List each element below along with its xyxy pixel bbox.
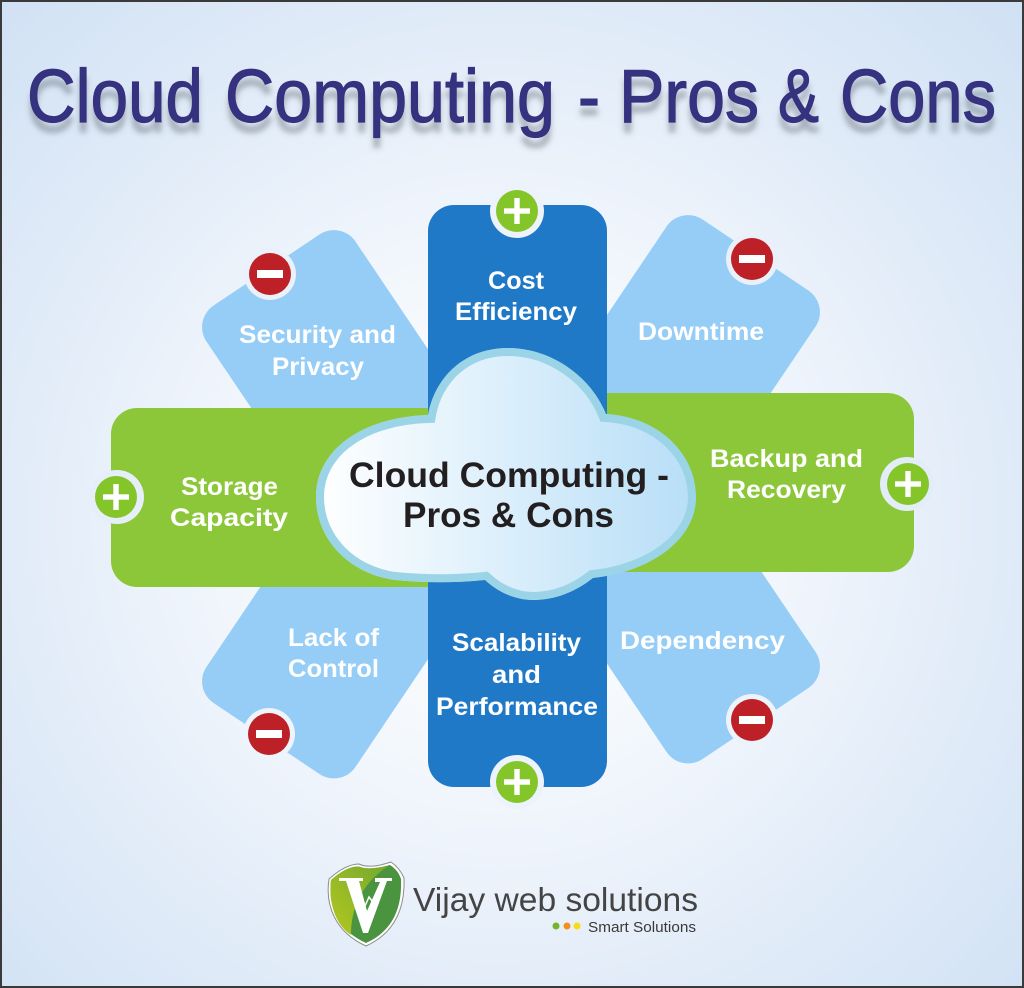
panel: storage capacity (pro) [111, 408, 511, 587]
title: & [778, 54, 819, 138]
cloud heading [349, 456, 669, 535]
panel: lack of control (con) [202, 580, 442, 778]
label: scalability and performance: and [492, 661, 541, 689]
label: cost efficiency: Efficiency [455, 298, 577, 326]
label: cost efficiency: Cost [488, 267, 545, 295]
label: storage capacity [170, 473, 288, 532]
title: - [578, 54, 600, 138]
logo [328, 862, 698, 946]
label: downtime: Downtime [638, 318, 764, 346]
label: lack of control: Lack of [288, 624, 380, 652]
title: Cons [840, 54, 996, 138]
title [27, 54, 996, 138]
label: backup and recovery: Recovery [727, 476, 846, 504]
icon: plus left [90, 470, 144, 524]
icon: plus right [880, 457, 934, 511]
icon: minus lack of control [243, 708, 295, 760]
label: scalability and performance: Scalability [452, 629, 581, 657]
cloud heading: Cloud Computing - [349, 456, 669, 495]
label: backup and recovery [710, 445, 863, 504]
label: security and privacy: Security and [239, 321, 396, 349]
label: storage capacity: Capacity [170, 504, 288, 532]
label: security and privacy [239, 321, 396, 381]
tagline: Smart Solutions [588, 920, 696, 936]
icon: minus security [244, 248, 296, 300]
label: lack of control [288, 624, 380, 683]
panel: dependency (con) [580, 560, 820, 763]
title: Computing [225, 54, 555, 138]
icon: plus top [490, 184, 544, 238]
label: dependency: Dependency [620, 627, 785, 655]
company name: Vijay web solutions [413, 882, 698, 919]
label: security and privacy: Privacy [272, 353, 364, 381]
cloud [316, 348, 696, 600]
icon: minus dependency [726, 694, 778, 746]
title: Cloud [27, 54, 203, 138]
icon: minus downtime [726, 233, 778, 285]
label: scalability and performance [436, 629, 598, 721]
tagline dots [552, 922, 580, 930]
icon: plus bottom [490, 755, 544, 809]
label: storage capacity: Storage [181, 473, 278, 501]
label: scalability and performance: Performance [436, 693, 598, 721]
label: backup and recovery: Backup and [710, 445, 863, 473]
panel: backup and recovery (pro) [520, 393, 914, 572]
label: lack of control: Control [288, 655, 379, 683]
panel: security and privacy (con) [202, 230, 442, 420]
title: Pros [619, 54, 759, 138]
panel: cost efficiency and scalability (pro) [428, 205, 607, 787]
icon: shield [328, 862, 404, 946]
cloud heading: Pros & Cons [403, 496, 614, 535]
panel: downtime (con) [580, 215, 820, 405]
label: cost efficiency [455, 267, 577, 326]
